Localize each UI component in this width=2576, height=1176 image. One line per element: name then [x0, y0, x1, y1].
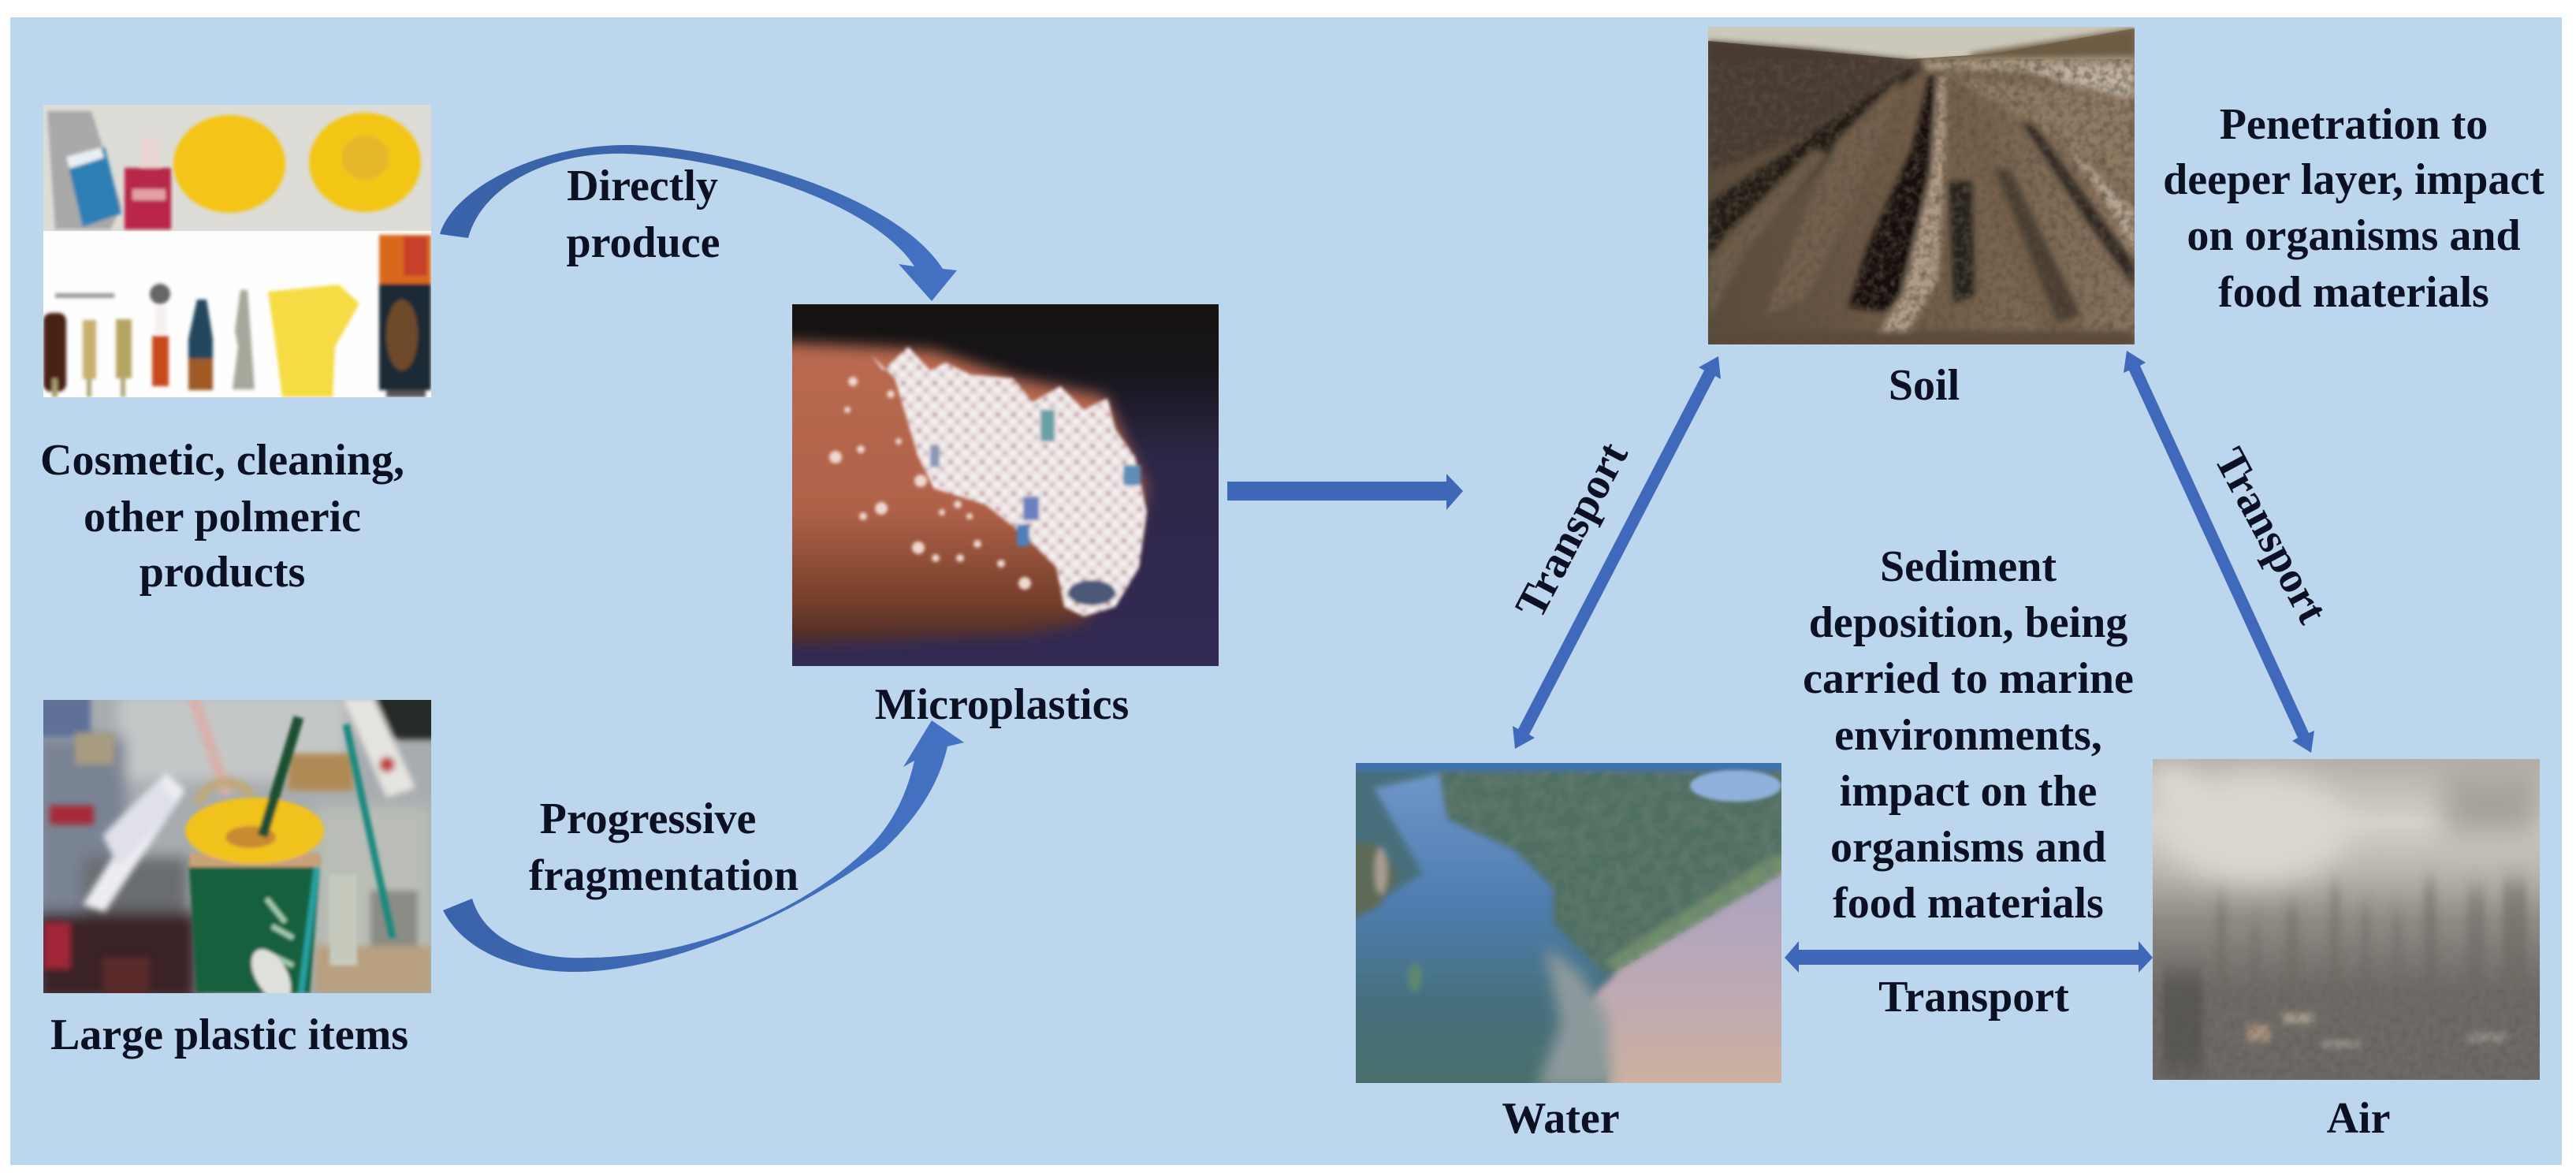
text: water impact: impact on the [1840, 767, 2097, 816]
text: water impact: food materials [1833, 879, 2104, 928]
label: cosmetic products: other polmeric [84, 493, 361, 541]
label: large plastic items: Large plastic items [50, 1010, 408, 1059]
text: soil impact: food materials [2218, 268, 2489, 317]
label: directly produce: produce [566, 218, 720, 267]
arrow: directly produce curve [440, 145, 957, 301]
arrow: soil air transport [2124, 351, 2314, 753]
text: water impact: organisms and [1830, 823, 2106, 872]
label: cosmetic products: products [140, 548, 305, 597]
arrow: microplastics to environment [1227, 474, 1463, 510]
text: water impact: Sediment [1880, 542, 2057, 591]
text: water impact: deposition, being [1809, 598, 2127, 647]
text: soil impact: on organisms and [2187, 211, 2521, 260]
photo: large plastic items [43, 700, 431, 993]
label: cosmetic products: Cosmetic, cleaning, [40, 436, 404, 485]
photo: polluted air over city [2153, 759, 2540, 1080]
label: progressive fragmentation: fragmentation [529, 851, 798, 900]
label: soil: Soil [1889, 361, 1960, 410]
label: directly produce: Directly [567, 162, 718, 210]
arrow: progressive fragmentation curve [443, 720, 964, 972]
text: water impact: environments, [1834, 711, 2102, 760]
label: transport left: Transport [1506, 434, 1638, 626]
text: soil impact: deeper layer, impact [2163, 155, 2544, 204]
text: water impact: carried to marine [1803, 654, 2134, 703]
text: soil impact: Penetration to [2220, 100, 2488, 149]
photo: cosmetic and cleaning products [43, 105, 431, 397]
label: air: Air [2327, 1094, 2390, 1143]
photo: microplastics on fingertip [792, 304, 1219, 666]
label: transport bottom: Transport [1878, 973, 2069, 1022]
label: water: Water [1502, 1094, 1620, 1143]
label: microplastics: Microplastics [875, 680, 1129, 729]
label: progressive fragmentation: Progressive [540, 795, 756, 843]
arrow: water air transport [1785, 941, 2153, 973]
photo: soil field [1708, 27, 2135, 344]
photo: river water [1356, 763, 1781, 1083]
label: transport right: Transport [2205, 440, 2337, 631]
arrow: water soil transport [1513, 356, 1721, 749]
